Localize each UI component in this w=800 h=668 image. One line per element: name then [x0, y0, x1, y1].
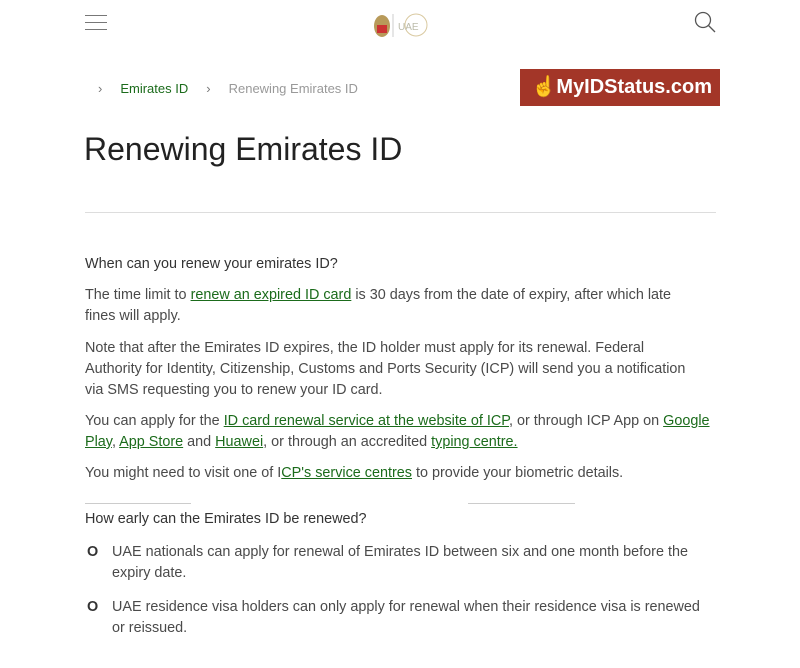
- watermark badge: MyIDStatus.com: [520, 69, 720, 106]
- watermark badge: MyIDStatus.com: ☝MyIDStatus.com: [532, 76, 712, 98]
- bullet: UAE nationals: expiry date.: [112, 565, 186, 581]
- title: Renewing Emirates ID: [84, 131, 402, 167]
- paragraph: time limit: [85, 287, 671, 324]
- paragraph: notification: Authority for Identity, Citizenship, Customs and Ports Security (ICP) will send you a notification: [85, 361, 685, 377]
- paragraph: notification: Note that after the Emirates ID expires, the ID holder must apply for its renewal. Federal: [85, 340, 644, 356]
- paragraph: notification: [85, 340, 685, 398]
- paragraph: apply channels: You can apply for the ID card renewal service at the website of ICP, or through ICP App on Google: [85, 413, 710, 429]
- section heading: how early: How early can the Emirates ID be renewed?: [85, 511, 367, 527]
- breadcrumb: › Emirates ID › Renewing Emirates ID: [98, 81, 358, 96]
- logo: UAE emblem: UAE: [398, 22, 419, 33]
- paragraph: time limit: fines will apply.: [85, 308, 181, 324]
- section heading: when can you renew: When can you renew your emirates ID?: [85, 256, 338, 272]
- paragraph: apply channels: [85, 413, 710, 450]
- logo: UAE emblem: [374, 14, 428, 37]
- icon: hamburger menu: [85, 15, 107, 30]
- bullet: UAE nationals: UAE nationals can apply for renewal of Emirates ID between six and one month before the: [112, 544, 688, 560]
- paragraph: apply channels: Play, App Store and Huawei, or through an accredited typing centre.: [85, 434, 518, 450]
- bullet: residence visa holders: [87, 599, 700, 636]
- bullet: UAE nationals: O: [87, 544, 98, 560]
- bullet: residence visa holders: O: [87, 599, 98, 615]
- icon: search: [694, 12, 716, 32]
- bullet: UAE nationals: [87, 544, 688, 581]
- bullet: residence visa holders: or reissued.: [112, 620, 187, 636]
- paragraph: biometrics: You might need to visit one of ICP's service centres to provide your biometric details.: [85, 465, 623, 481]
- bullet: residence visa holders: UAE residence visa holders can only apply for renewal when their residence visa is renewed: [112, 599, 700, 615]
- paragraph: notification: via SMS requesting you to renew your ID card.: [85, 382, 383, 398]
- paragraph: time limit: The time limit to renew an expired ID card is 30 days from the date of expiry, after which late: [85, 287, 671, 303]
- bullet list: [87, 544, 700, 636]
